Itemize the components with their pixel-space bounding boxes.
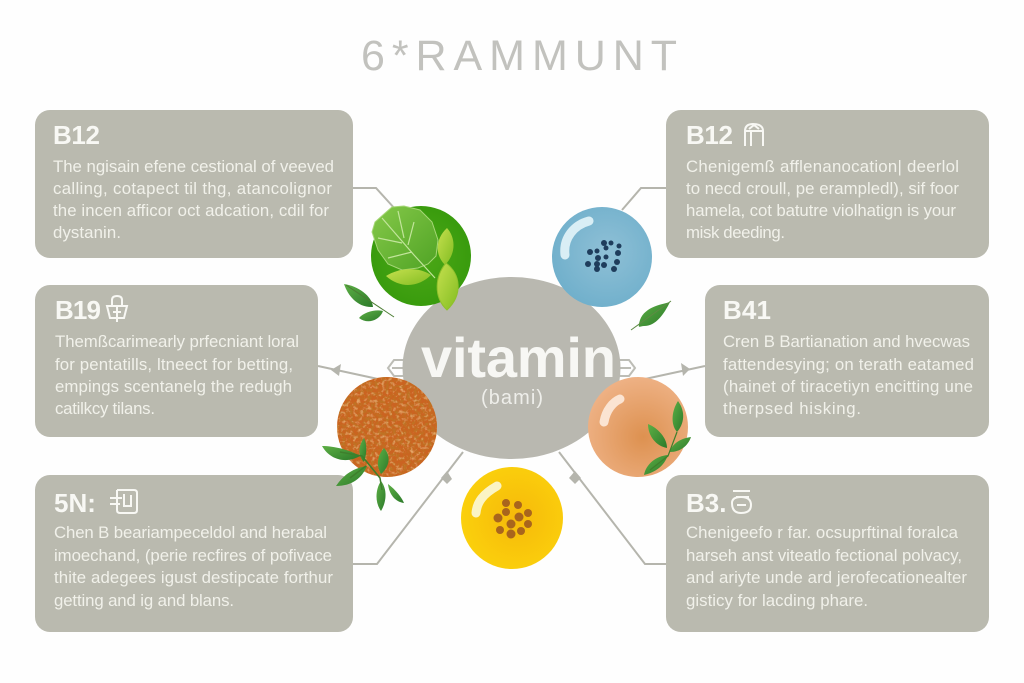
body text	[686, 523, 967, 610]
heading: 5N:	[54, 488, 96, 518]
body text: Themßcarimearly prfecniant loral	[55, 332, 299, 351]
connector: middle right panel to peach circle	[645, 363, 705, 379]
body text	[55, 332, 299, 418]
heading: B41	[723, 295, 771, 325]
panel: bottom right B3	[666, 475, 989, 632]
body text: the incen afficor oct adcation, cdil for	[53, 201, 329, 220]
icon: peach circle	[588, 377, 688, 477]
body text: misk deeding.	[686, 223, 785, 242]
body text: thite adegees igust destipcate forthur	[54, 568, 333, 587]
panel: top left B12	[35, 110, 353, 258]
body text	[53, 157, 334, 242]
body text	[686, 157, 959, 242]
body text: calling, cotapect til thg, atancolignor	[53, 179, 332, 198]
hollow arrow: right of center	[618, 360, 635, 376]
body text: gisticy for lacding phare.	[686, 591, 868, 610]
body text: getting and ig and blans.	[54, 591, 234, 610]
icon: document glyph	[110, 490, 137, 513]
heading: B19	[55, 295, 101, 325]
title: 6*RAMMUNT	[361, 32, 677, 80]
body text: and ariyte unde ard jerofecationealter	[686, 568, 967, 587]
connector: middle left panel to orange circle	[318, 364, 378, 379]
body text: to necd croull, pe erampledl), sif foor	[686, 179, 959, 198]
heading: B12	[686, 120, 733, 150]
panel: bottom left 5N	[35, 475, 353, 632]
icon: yellow circle with seeds	[461, 467, 563, 569]
body text: Chen B beariampeceldol and herabal	[54, 523, 327, 542]
icon: leaves on peach circle	[644, 401, 691, 475]
body text: fattendesying; on terath eatamed	[723, 355, 974, 374]
connector: top right panel to blue circle	[622, 188, 666, 210]
center title: vitamin	[421, 326, 616, 389]
icon: green circle with leaves	[371, 206, 471, 310]
center circle	[402, 277, 620, 459]
body text: Cren B Bartianation and hvecwas	[723, 332, 970, 351]
icon: small leaf right	[631, 301, 671, 330]
body text: (hainet of tiracetiyn encitting une	[723, 377, 973, 396]
heading: B12	[53, 120, 100, 150]
icon: lock glyph	[107, 296, 127, 322]
center subtitle: (bami)	[481, 387, 543, 409]
body text: therpsed hisking.	[723, 399, 861, 418]
body text: The ngisain efene cestional of veeved	[53, 157, 334, 176]
body text: dystanin.	[53, 223, 121, 242]
body text: for pentatills, ltneect for betting,	[55, 355, 293, 374]
body text: Chenigeefo r far. ocsuprftinal foralca	[686, 523, 959, 542]
panel: middle left B19	[35, 285, 318, 437]
panel: middle right B41	[705, 285, 989, 437]
body text: hamela, cot batutre violhatign is your	[686, 201, 956, 220]
icon: pot glyph	[732, 491, 751, 513]
body text	[54, 523, 333, 610]
icon: arch	[745, 124, 763, 146]
body text: empings scentanelg the redugh	[55, 377, 292, 396]
icon: blue circle with seeds	[552, 207, 652, 307]
body text: catilkcy tilans.	[55, 399, 155, 418]
body text	[723, 332, 974, 418]
heading: B3.	[686, 488, 726, 518]
hollow arrow: left of center	[388, 360, 404, 376]
body text: imoechand, (perie recfires of pofivace	[54, 546, 332, 565]
icon: leaves on orange circle	[322, 438, 404, 511]
icon: orange spice circle	[337, 377, 437, 477]
connector: bottom right panel to center	[559, 452, 666, 564]
body text: harseh anst viteatlo fectional polvacy,	[686, 546, 962, 565]
connector: top left panel to green circle	[353, 188, 396, 210]
panel: top right B12	[666, 110, 989, 258]
icon: small leaves left	[344, 284, 394, 321]
connector: bottom left panel to center	[353, 452, 463, 564]
body text: Chenigemß afflenanocation| deerlol	[686, 157, 959, 176]
